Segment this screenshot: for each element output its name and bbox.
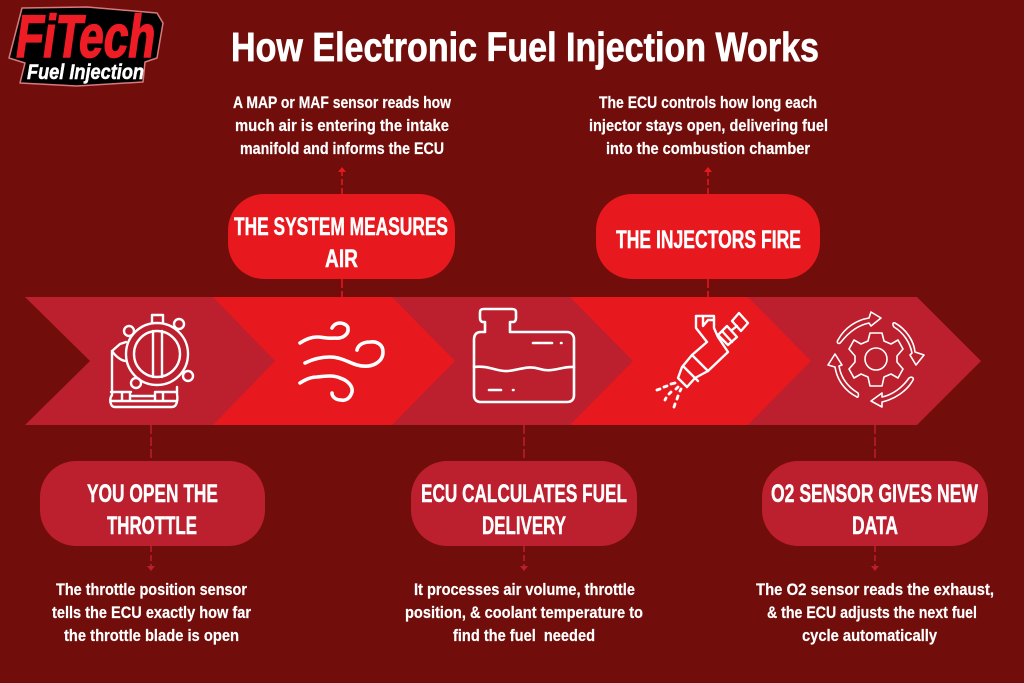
logo: FiTech Fuel Injection: FiTech [12, 2, 161, 70]
text: MAP or MAF sensor [233, 94, 451, 158]
text: O2 sensor reads exhaust [756, 581, 994, 645]
text: O2 sensor reads exhaust: The O2 sensor reads the exhaust, [756, 581, 994, 599]
title: How Electronic Fuel Injection Works [231, 24, 819, 70]
text: ECU processes: It processes air volume, throttle [414, 581, 635, 599]
text: MAP or MAF sensor: A MAP or MAF sensor reads how [233, 94, 451, 112]
logo: FiTech Fuel Injection [9, 2, 163, 86]
logo: FiTech Fuel Injection: Fuel Injection [27, 61, 144, 84]
icon: throttle body [110, 315, 193, 407]
text: O2 sensor reads exhaust: cycle automatically [802, 627, 938, 645]
pill: ECU calculates fuel delivery: DELIVERY [482, 512, 566, 540]
text: MAP or MAF sensor: manifold and informs the ECU [240, 140, 444, 158]
text: ECU processes: find the fuel needed [453, 627, 595, 645]
text: MAP or MAF sensor: much air is entering the intake [235, 117, 449, 135]
pill: you open the throttle: THROTTLE [107, 512, 197, 540]
pill: O2 sensor gives new data [762, 461, 988, 546]
pill: O2 sensor gives new data: DATA [852, 512, 898, 540]
text: ECU processes [405, 581, 643, 645]
text: ECU controls injectors: into the combustion chamber [606, 140, 810, 158]
text: ECU controls injectors [589, 94, 828, 158]
pill: ECU calculates fuel delivery: ECU CALCULATES FUEL [421, 480, 627, 508]
pill: the system measures air: AIR [325, 245, 358, 273]
text: O2 sensor reads exhaust: & the ECU adjusts the next fuel [767, 604, 977, 622]
text: throttle position sensor [52, 581, 252, 645]
text: ECU controls injectors: The ECU controls how long each [599, 94, 817, 112]
text: throttle position sensor: the throttle blade is open [64, 627, 239, 645]
connector: ECU down [520, 425, 528, 571]
text: ECU processes: position, & coolant temperature to [405, 604, 643, 622]
icon: spray [657, 383, 681, 407]
pill: you open the throttle: YOU OPEN THE [87, 480, 218, 508]
icon: fuel tank [474, 309, 574, 402]
connector: O2 down [871, 425, 879, 571]
pill: the injectors fire [596, 194, 820, 279]
icon: gear with cycle arrows [828, 312, 924, 407]
process arrow band [25, 297, 981, 425]
text: ECU controls injectors: injector stays open, delivering fuel [589, 117, 828, 135]
pill: ECU calculates fuel delivery [411, 461, 637, 546]
icon: wind [300, 323, 383, 400]
text: throttle position sensor: tells the ECU exactly how far [52, 604, 252, 622]
pill: the injectors fire: THE INJECTORS FIRE [616, 226, 801, 254]
connector: air up [338, 167, 346, 297]
icon: fuel injector [678, 313, 748, 387]
text: throttle position sensor: The throttle position sensor [56, 581, 247, 599]
connector: injectors up [704, 167, 712, 297]
pill: you open the throttle [40, 461, 265, 546]
pill: the system measures air [228, 194, 455, 279]
connector: throttle down [147, 425, 155, 571]
pill: the system measures air: THE SYSTEM MEASURES [234, 213, 448, 241]
